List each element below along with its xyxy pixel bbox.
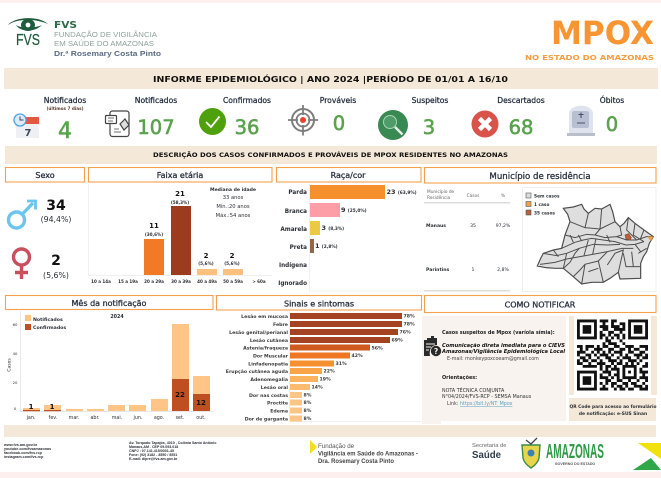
table: municipalities: Manaus xyxy=(426,223,446,229)
panel: mês da notificação xyxy=(6,296,213,421)
footer: secretaria de saúde: Saúde xyxy=(472,450,501,461)
logo: FVS xyxy=(8,18,162,58)
icon: clipboard with question mark xyxy=(424,336,441,356)
logo: FVS: FUNDAÇÃO DE VIGILÂNCIA xyxy=(54,30,157,39)
male count xyxy=(41,198,71,224)
bar chart: age: 10 a 14a xyxy=(91,279,111,284)
footer: address: E-mail: dipre@fvs.am.gov.br xyxy=(129,457,178,461)
kpi: descartados: Descartados xyxy=(497,96,545,105)
bar chart: symptoms: 19% xyxy=(320,376,331,382)
bar chart: symptoms: Adenomegalia xyxy=(250,377,288,383)
panel: como notificar xyxy=(422,296,657,424)
table: municipalities: 35 xyxy=(470,223,476,229)
footer: Amazonas crest xyxy=(522,438,540,468)
table: municipalities: 1 xyxy=(472,267,475,273)
stacked bar chart: month: 12 xyxy=(196,399,206,407)
footer: address: Fone: (92) 3182 - 8550 / 8551 xyxy=(129,453,177,457)
text: mediana de idade: Mín.:20 anos xyxy=(216,203,250,210)
bar chart: race: Preta xyxy=(290,245,307,251)
panel: sinais e sintomas xyxy=(216,296,422,422)
stacked bar chart: month xyxy=(6,311,213,421)
QR caption: QR Code para acesso ao formulário xyxy=(569,403,657,410)
panel: faixa etária xyxy=(88,168,272,284)
QR code xyxy=(569,316,657,395)
bar chart: age: (30,6%) xyxy=(145,232,163,237)
kpi: descartados xyxy=(472,96,545,139)
bar chart: symptoms: 69% xyxy=(392,338,403,344)
bar chart: age: 40 a 49a xyxy=(197,279,217,284)
footer: secretaria de saúde xyxy=(472,443,506,461)
QR caption xyxy=(569,398,657,421)
heading: mês da notificação: Mês da notificação xyxy=(72,298,147,308)
map legend: 35 casos xyxy=(534,210,555,216)
icon: phone with notification xyxy=(106,111,129,136)
map legend: 1 caso xyxy=(534,202,549,208)
bar chart: symptoms: 78% xyxy=(404,314,415,320)
bar chart: symptoms: 76% xyxy=(400,330,411,336)
bar chart: age xyxy=(88,184,272,284)
bar chart: age: 11 xyxy=(149,222,159,230)
bar chart: symptoms: 22% xyxy=(324,368,335,374)
bar chart: age: 2 xyxy=(204,252,209,260)
bar chart: symptoms: Linfadenopatia xyxy=(248,362,288,368)
footer: FVS foundation logo: Fundação de xyxy=(318,443,355,450)
text: mediana de idade: Máx.:54 anos xyxy=(216,212,251,219)
footer: social links: facebook.com/fvs.rcp xyxy=(4,451,43,455)
icon: magnifying glass xyxy=(378,110,408,140)
bar chart: race: Parda xyxy=(288,190,307,196)
stacked bar chart: month: set. xyxy=(176,415,184,421)
footer: corner decoration xyxy=(633,443,661,470)
text block: orientações xyxy=(422,316,566,424)
kpi: óbitos: Óbitos xyxy=(600,96,624,105)
logo: FVS: Dr.ª Rosemary Costa Pinto xyxy=(54,49,162,58)
kpi: notificados: 107 xyxy=(137,116,175,139)
bar chart: symptoms: 31% xyxy=(336,361,347,367)
text: mediana de idade: Mediana de idade xyxy=(210,187,256,193)
heading: mês da notificação xyxy=(6,296,213,310)
kpi: suspeitos: 3 xyxy=(423,116,435,139)
stacked bar chart: month: 1 xyxy=(50,403,55,411)
table: municipalities: 97,2% xyxy=(496,223,511,229)
heading: raça/cor: Raça/cor xyxy=(331,171,366,180)
stacked bar chart: month: fev. xyxy=(49,415,57,421)
heading: faixa etária xyxy=(88,168,272,182)
footer: social links: youtube.com/fvsamazonas xyxy=(4,447,51,451)
stacked bar chart: month: 60 xyxy=(13,322,18,327)
bar chart: race: 9 (25,0%) xyxy=(341,206,367,214)
text block: orientações: N°04/2024/FVS-RCP - SEMSA Manaus xyxy=(442,394,532,400)
bar chart: race: Indígena xyxy=(279,262,307,269)
footer: FVS foundation logo: Vigilância em Saúde do Amazonas - xyxy=(318,450,418,458)
stacked bar chart: month: jan. xyxy=(26,415,35,421)
bar chart: symptoms: Lesão cutânea xyxy=(250,337,288,344)
footer: FVS foundation logo: Dra. Rosemary Costa Pinto xyxy=(318,458,394,465)
text block: orientações: Orientações: xyxy=(442,375,477,381)
stacked bar chart: month: 22 xyxy=(175,391,185,399)
heading: faixa etária: Faixa etária xyxy=(157,171,203,180)
table: municipalities: Município de xyxy=(427,188,455,195)
panel: município de residência xyxy=(424,168,656,292)
bar chart: symptoms: Lesão em mucosa xyxy=(241,314,288,320)
bar chart: race: Amarela xyxy=(280,227,307,233)
kpi: prováveis: 0 xyxy=(333,112,345,135)
stacked bar chart: month: mai. xyxy=(112,415,122,421)
stacked bar chart: month: 1 xyxy=(29,403,34,411)
bar chart: race: Branca xyxy=(285,209,307,215)
kpi: óbitos: 0 xyxy=(606,113,618,136)
bar chart: race xyxy=(278,184,421,291)
icon: target xyxy=(288,105,318,136)
map shape xyxy=(537,204,653,284)
table: municipalities: 2,8% xyxy=(497,267,509,273)
footer: Amazonas wordmark: GOVERNO DO ESTADO xyxy=(555,462,595,466)
bar chart: symptoms: Dor de garganta xyxy=(245,416,288,422)
bar chart: age: 20 a 29a xyxy=(144,279,164,284)
bar chart: symptoms: Lesão genital/perianal xyxy=(229,330,288,336)
icon: male symbol xyxy=(8,201,36,228)
chart legend xyxy=(25,315,66,331)
footer: Amazonas wordmark: AMAZONAS xyxy=(546,441,604,463)
male count: 34 xyxy=(46,198,66,214)
heading: como notificar xyxy=(424,296,656,312)
table: municipalities: Parintins xyxy=(426,267,449,273)
male count: (94,4%) xyxy=(41,215,71,224)
heading: informe epidemiológico: INFORME EPIDEMIOLÓGICO | ANO 2024 |PERÍODO DE 01/01 A 16/10 xyxy=(153,73,508,84)
bar chart: age: > 60a xyxy=(252,279,266,284)
bar chart: symptoms: Erupção cutânea aguda xyxy=(226,368,288,375)
logo: FVS: EM SAÚDE DO AMAZONAS xyxy=(54,39,154,48)
footer: social links: www.fvs.am.gov.br xyxy=(3,443,38,447)
bar chart: symptoms: Dor Muscular xyxy=(253,354,289,360)
heading: como notificar: COMO NOTIFICAR xyxy=(505,300,576,310)
footer: address xyxy=(129,441,217,461)
bar chart: symptoms: Dor nas costas xyxy=(249,393,288,399)
bar chart: age: 15 a 19a xyxy=(118,279,138,284)
bar chart: race: 1 (2,8%) xyxy=(315,242,338,250)
heading: informe epidemiológico xyxy=(4,68,658,89)
title: MPOX: MPOX xyxy=(551,14,654,52)
bar chart: symptoms: 78% xyxy=(404,322,415,328)
footer: social links xyxy=(3,443,51,459)
title: MPOX xyxy=(525,14,654,62)
kpi: prováveis xyxy=(288,96,356,136)
text block: orientações: Casos suspeitos de Mpox (varíola símia): xyxy=(442,329,555,336)
heading: descrição dos casos: DESCRIÇÃO DOS CASOS CONFIRMADOS E PROVÁVEIS DE MPOX RESIDENTES NO AMAZONAS xyxy=(153,150,508,159)
footer: address: Av. Torquato Tapajós, 4010 , Colônia Santo Antônio xyxy=(129,441,217,445)
map legend xyxy=(526,193,560,216)
table: municipalities: % xyxy=(501,193,505,199)
kpi: notificados xyxy=(106,96,177,139)
female count: (5,6%) xyxy=(43,271,69,280)
text block: orientações: Amazonas/Vigilância Epidemiológica Local xyxy=(441,348,565,355)
bar chart: symptoms: 8% xyxy=(304,408,312,414)
kpi: óbitos xyxy=(567,96,624,136)
bar chart: symptoms: 14% xyxy=(312,384,323,390)
kpi: notificados últimos 7 dias: (últimos 7 dias) xyxy=(46,106,84,111)
text: mediana de idade xyxy=(210,187,256,219)
text block: orientações: E-mail: monkeypoxcoeam@gmail.com xyxy=(447,356,539,362)
bar chart: symptoms: 8% xyxy=(304,416,312,422)
heading: raça/cor xyxy=(276,168,421,182)
bar chart: symptoms: 8% xyxy=(304,392,312,398)
bar chart: age: (58,3%) xyxy=(171,200,189,205)
kpi: notificados: Notificados xyxy=(135,96,177,105)
stacked bar chart: month: 40 xyxy=(13,351,18,356)
title: MPOX: NO ESTADO DO AMAZONAS xyxy=(525,53,654,62)
heading: sinais e sintomas: Sinais e sintomas xyxy=(284,300,354,308)
bar chart: age: 30 a 39a xyxy=(171,279,191,284)
text block: orientações: Comunicação direta imediata para o CIEVS xyxy=(442,343,566,349)
icon: female symbol xyxy=(14,249,30,279)
kpi: notificados últimos 7 dias: Notificados xyxy=(44,96,86,105)
kpi: notificados últimos 7 dias xyxy=(14,96,86,144)
female count: 2 xyxy=(51,253,61,269)
bar chart: symptoms: Edema xyxy=(270,408,288,414)
chart legend: Notificados xyxy=(33,317,63,323)
logo: FVS: FVS xyxy=(54,20,77,31)
kpi: confirmados: Confirmados xyxy=(223,96,271,105)
stacked bar chart: month: Casos xyxy=(6,358,12,372)
text: mediana de idade: 33 anos xyxy=(223,195,244,201)
kpi: confirmados xyxy=(199,96,271,139)
text block: orientações: Link: https://bit.ly/NT_Mpox xyxy=(447,401,513,407)
bar chart: symptoms: 56% xyxy=(372,346,383,352)
stacked bar chart: month: ago. xyxy=(154,416,164,421)
bar chart: symptoms: Lesão oral xyxy=(261,385,288,391)
bar chart: symptoms: Febre xyxy=(273,322,288,328)
icon: cross xyxy=(472,110,498,138)
footer: social links: instagram.com/fvs.rcp xyxy=(4,455,44,459)
kpi: suspeitos: Suspeitos xyxy=(412,96,448,105)
bar chart: race: 23 (63,9%) xyxy=(386,188,417,196)
icon: calendar and clock: 7 xyxy=(25,128,32,139)
stacked bar chart: month: out. xyxy=(196,415,206,421)
icon: clipboard with question mark: ? xyxy=(434,347,438,356)
panel: raça/cor xyxy=(276,168,421,291)
kpi: suspeitos xyxy=(378,96,448,140)
bar chart: symptoms xyxy=(226,311,421,422)
bar chart: age: (5,6%) xyxy=(198,261,214,266)
heading: município de residência xyxy=(424,168,656,183)
heading: município de residência: Município de residência xyxy=(489,171,591,182)
footer: address: CNPJ : 07.141.415/0001-45 xyxy=(129,449,174,453)
table: municipalities: Casos xyxy=(467,193,480,199)
map legend: Sem casos xyxy=(534,194,560,200)
stacked bar chart: month: jun. xyxy=(133,415,142,421)
bar chart: symptoms: 42% xyxy=(352,353,363,359)
map: Amazonas xyxy=(522,188,656,292)
stacked bar chart: month: 0 xyxy=(14,406,17,411)
bar chart: symptoms: Astenia/fraqueza xyxy=(243,346,288,352)
chart legend: Confirmados xyxy=(33,325,66,331)
heading: sexo: Sexo xyxy=(35,171,55,180)
footer: address: Manaus,AM . CEP 69.093.018 xyxy=(129,445,178,449)
heading: sinais e sintomas xyxy=(216,296,422,310)
kpi: notificados últimos 7 dias: 4 xyxy=(58,119,72,144)
icon: tombstone xyxy=(567,106,595,136)
bar chart: age: 21 xyxy=(175,190,185,198)
logo: FVS: FVS xyxy=(16,32,40,49)
female count xyxy=(43,253,69,280)
footer: secretaria de saúde: Secretaria de xyxy=(472,443,506,449)
stacked bar chart: month: 2024 xyxy=(110,314,124,320)
bar chart: race: 3 (8,3%) xyxy=(322,224,344,232)
stacked bar chart: month: mar. xyxy=(69,415,79,421)
QR caption: de notificação: e-SUS Sinan xyxy=(579,411,647,417)
bar chart: symptoms: 8% xyxy=(304,400,312,406)
panel: sexo xyxy=(6,168,84,280)
kpi: confirmados: 36 xyxy=(235,116,259,139)
stacked bar chart: month: 20 xyxy=(13,380,18,385)
footer: Amazonas wordmark xyxy=(546,441,604,466)
footer: FVS foundation logo xyxy=(310,440,418,465)
heading: descrição dos casos xyxy=(5,146,657,164)
kpi: descartados: 68 xyxy=(509,116,533,139)
kpi: prováveis: Prováveis xyxy=(320,96,356,105)
bar chart: age: 2 xyxy=(230,252,235,260)
icon: check mark xyxy=(199,108,226,135)
bar chart: race: Ignorado xyxy=(278,281,307,287)
table: municipalities xyxy=(424,188,511,292)
bar chart: symptoms: Proctite xyxy=(267,400,288,406)
bar chart: age: 50 a 59a xyxy=(223,279,243,284)
stacked bar chart: month: abr. xyxy=(90,415,100,421)
table: municipalities: Residência xyxy=(427,194,451,201)
text block: orientações: NOTA TÉCNICA CONJUNTA xyxy=(442,386,505,394)
bar chart: age: (5,6%) xyxy=(224,261,240,266)
